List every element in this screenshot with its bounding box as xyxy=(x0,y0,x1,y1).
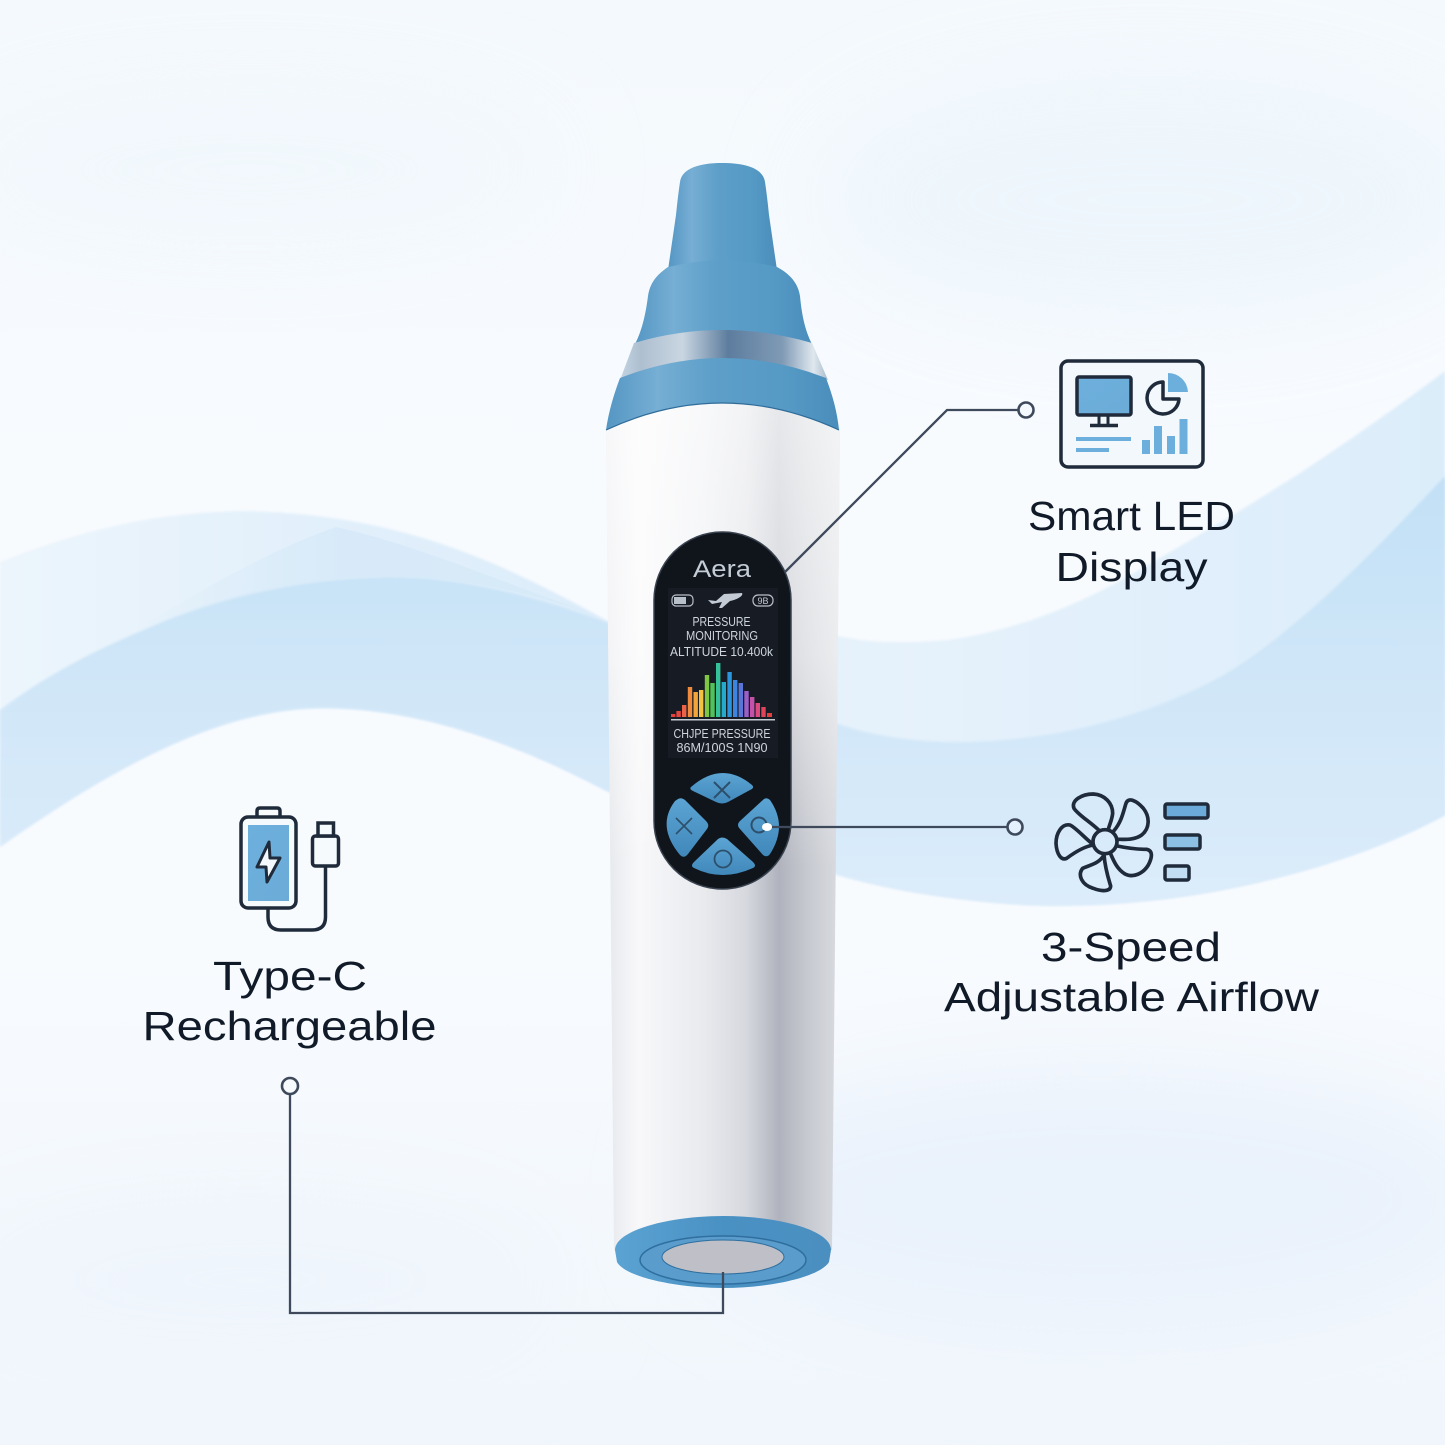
callout line: display xyxy=(785,402,1034,572)
screen panel xyxy=(654,532,791,889)
heading: smart led display xyxy=(1028,493,1235,590)
heading: type-c rechargeable: Rechargeable xyxy=(142,1003,436,1049)
screen heading text: MONITORING xyxy=(686,629,758,643)
heading: 3-speed adjustable airflow: Adjustable Airflow xyxy=(944,974,1319,1020)
icon: smart display xyxy=(1061,361,1203,467)
brand name: Aera xyxy=(693,556,752,583)
device body xyxy=(606,402,840,1250)
nozzle second tier xyxy=(634,260,813,346)
screen heading text: ALTITUDE 10.400k xyxy=(670,645,774,659)
button: up xyxy=(690,773,753,804)
heading: 3-speed adjustable airflow xyxy=(944,924,1319,1020)
heading: smart led display: Smart LED xyxy=(1028,493,1235,539)
callout line: airflow xyxy=(762,820,1022,834)
heading: type-c rechargeable xyxy=(142,953,436,1049)
screen footer text xyxy=(674,727,770,755)
transparent ring xyxy=(620,330,828,380)
chart axis xyxy=(671,719,775,720)
bar chart xyxy=(671,663,772,717)
screen heading text xyxy=(670,615,774,659)
blue collar xyxy=(606,358,839,430)
button: down xyxy=(692,838,755,875)
status icon: right: 9B xyxy=(757,596,769,606)
callout line: charging xyxy=(282,1078,723,1313)
icon: airplane xyxy=(708,593,742,608)
heading: type-c rechargeable: Type-C xyxy=(213,953,367,999)
status icon: battery left xyxy=(672,595,693,606)
button: left xyxy=(667,798,708,857)
button: right xyxy=(738,798,779,856)
background waves xyxy=(0,371,1445,906)
heading: smart led display: Display xyxy=(1056,544,1208,590)
nozzle tip xyxy=(668,163,777,270)
base ring xyxy=(615,1216,831,1288)
screen heading text: PRESSURE xyxy=(692,615,750,629)
screen footer text: 86M/100S 1N90 xyxy=(676,741,768,755)
device xyxy=(606,163,840,1288)
icon: fan with speed bars xyxy=(1056,794,1208,891)
status icon: right xyxy=(753,595,773,606)
screen footer text: CHJPE PRESSURE xyxy=(674,727,770,741)
heading: 3-speed adjustable airflow: 3-Speed xyxy=(1041,924,1221,970)
icon: type-c battery xyxy=(241,808,338,930)
